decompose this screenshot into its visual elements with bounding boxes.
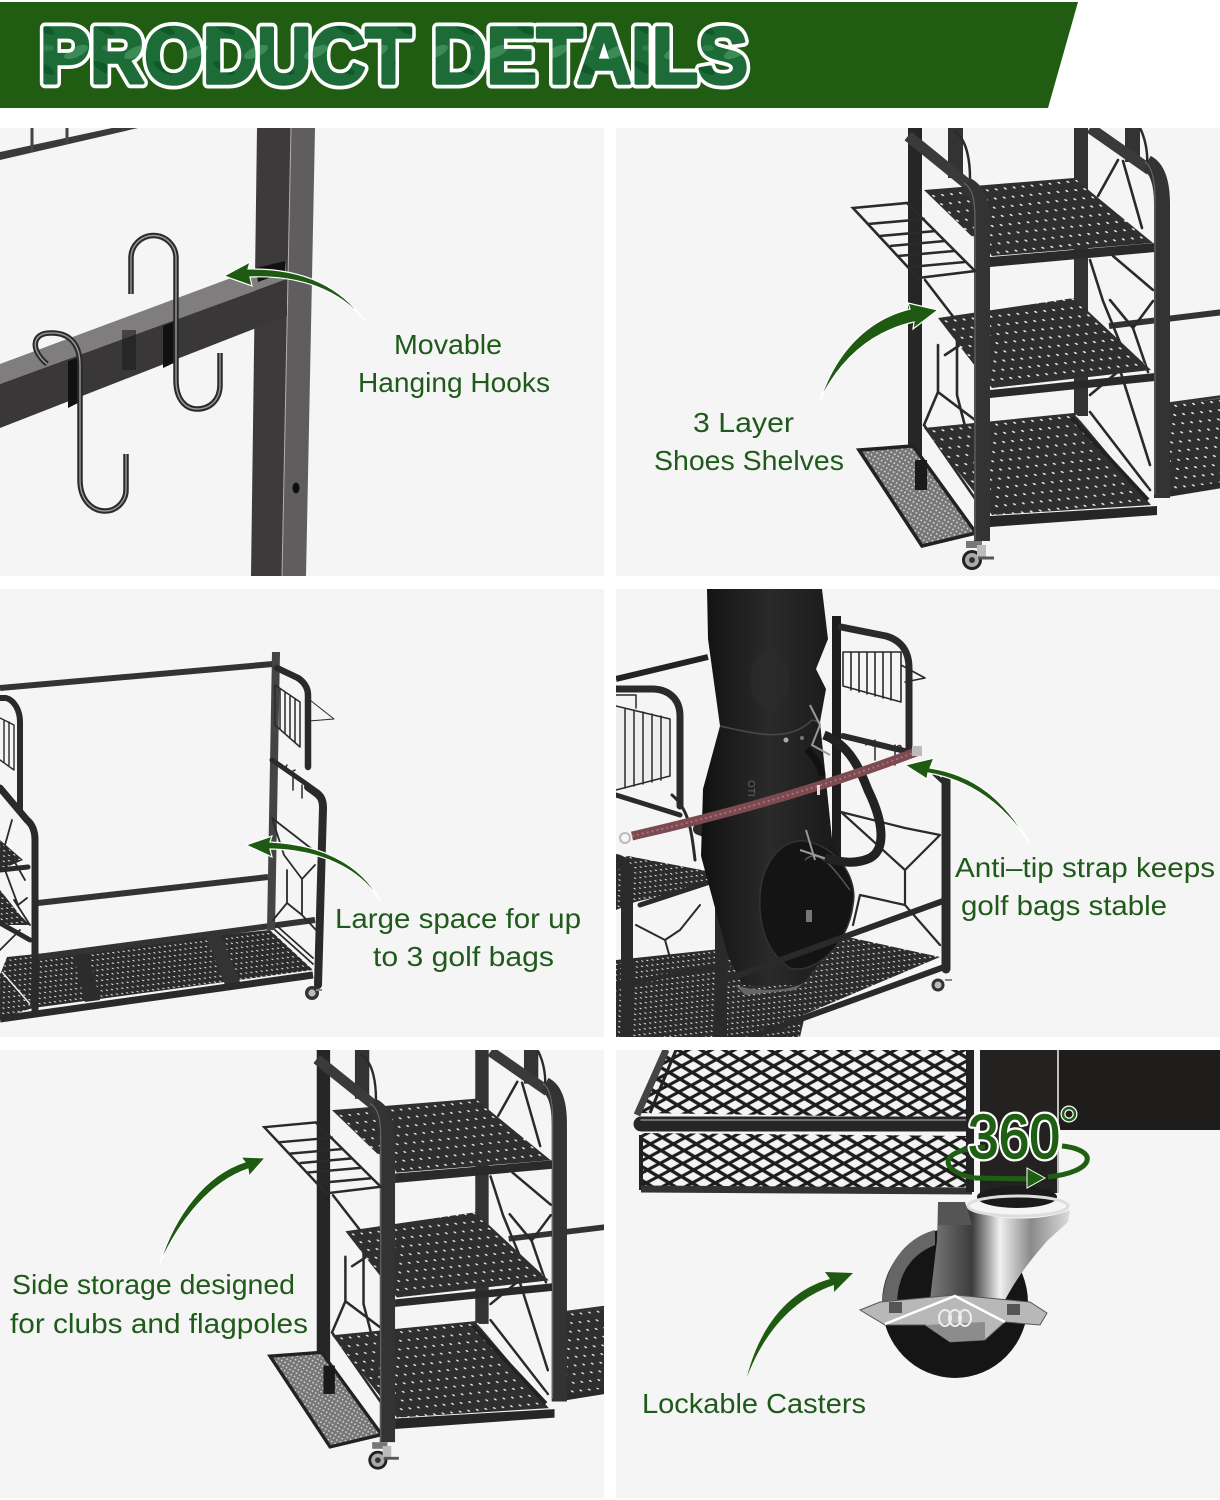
- icon: S hook left: [35, 333, 126, 511]
- golf bag: OTI: [745, 780, 756, 797]
- backpack pouch: [760, 841, 854, 969]
- arrow: [905, 758, 1030, 844]
- label: side storage: for clubs and flagpoles: [10, 1308, 308, 1339]
- title: PRODUCT DETAILS: [40, 11, 748, 100]
- front rail and post: [728, 770, 952, 1037]
- rack behind bag: [616, 616, 940, 1037]
- panel: anti-tip strap: [616, 589, 1220, 1037]
- 360 degree badge: 360: [968, 1103, 1060, 1172]
- anti-tip strap: [620, 746, 922, 843]
- label: large space: [335, 903, 581, 972]
- label: side storage: [10, 1269, 308, 1339]
- leg post and beam: [980, 1050, 1220, 1193]
- icon: S hook right: [131, 236, 220, 409]
- label: anti-tip strap: golf bags stable: [961, 890, 1167, 921]
- rack illustration: [264, 1044, 634, 1470]
- label: movable hanging hooks: Movable: [394, 329, 502, 360]
- panel: lockable casters: [616, 1050, 1220, 1498]
- open rack illustration: [0, 652, 334, 1019]
- arrow: [160, 1157, 265, 1263]
- label: movable hanging hooks: [358, 329, 550, 398]
- panel: side storage: [0, 1044, 634, 1498]
- arrow: [747, 1272, 853, 1377]
- partial top rack fragment: [0, 128, 138, 160]
- panel: movable hanging hooks: [0, 128, 604, 576]
- label: large space: to 3 golf bags: [373, 941, 554, 972]
- shoulder strap: [824, 735, 881, 862]
- label: 3 layer shoes shelves: Shoes Shelves: [654, 445, 844, 476]
- rack illustration: [853, 120, 1220, 570]
- label: 3 layer shoes shelves: [655, 412, 843, 470]
- label: large space: Large space for up: [335, 903, 581, 934]
- arrow: [224, 262, 365, 321]
- label: 3 layer shoes shelves: 3 Layer: [693, 407, 794, 438]
- label: anti-tip strap: [955, 852, 1215, 921]
- title banner: [0, 2, 1078, 108]
- arrow: [246, 836, 381, 902]
- title: PRODUCT DETAILS: [40, 11, 748, 100]
- label: lockable casters: Lockable Casters: [642, 1388, 866, 1419]
- panel: large space for golf bags: [0, 589, 604, 1037]
- vertical post: [251, 128, 315, 576]
- 360 degree badge: 360: [968, 1103, 1060, 1172]
- label: anti-tip strap: Anti–tip strap keeps: [955, 852, 1215, 883]
- caster: [860, 1186, 1070, 1378]
- mesh tray: [637, 1050, 974, 1192]
- label: movable hanging hooks: Hanging Hooks: [358, 367, 550, 398]
- horizontal crossbar: [0, 261, 287, 428]
- golf bag: [701, 589, 881, 1037]
- arrow: [820, 303, 938, 400]
- panel: 3 layer shoes shelves: [616, 120, 1220, 576]
- label: side storage: Side storage designed: [12, 1269, 295, 1300]
- 360 degree badge: [948, 1103, 1087, 1188]
